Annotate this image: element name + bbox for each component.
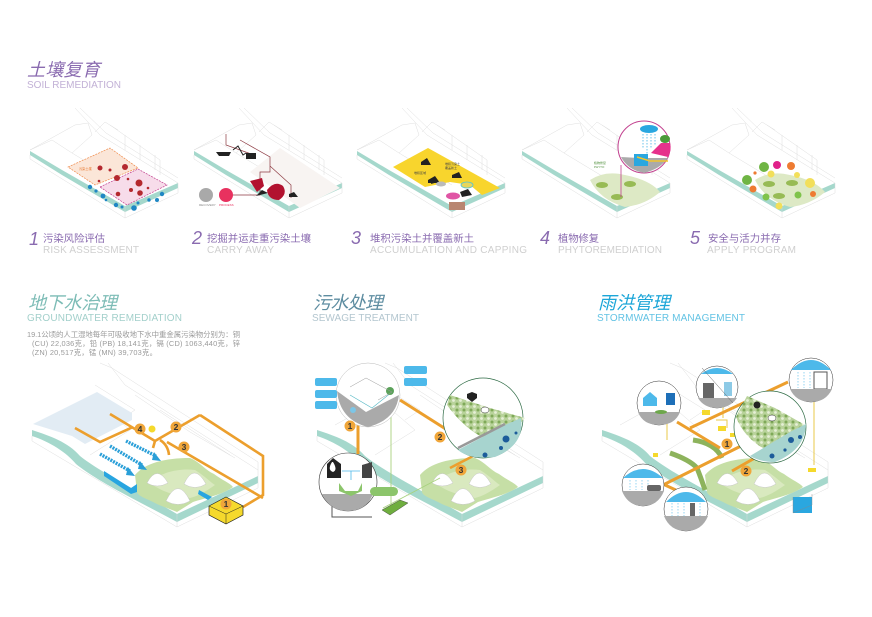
icon captions (199, 203, 234, 207)
label: step 2: 2 (191, 228, 202, 248)
wetland unit (382, 500, 408, 515)
label: step 3 (351, 228, 527, 256)
rain (643, 134, 655, 154)
bottom left circle (319, 453, 377, 511)
green caption: 植物修复 (594, 160, 606, 165)
circle icon: transport (219, 188, 233, 202)
number badges: 3 (182, 442, 187, 452)
text block: heavy metal absorption: (CU) 22,036克，铅 (PB) 18,141克，镉 (CD) 1063,440克，锌 (32, 339, 241, 348)
label: step 1 (29, 229, 139, 256)
label: step 2: CARRY AWAY (207, 245, 274, 256)
yellow treatment box (209, 497, 243, 524)
excavation machines (216, 146, 298, 197)
green caption (594, 160, 606, 169)
label: step 5: 安全与活力并存 (708, 232, 781, 245)
number badges: 1 (725, 439, 730, 449)
label: step 3: ACCUMULATION AND CAPPING (370, 245, 527, 256)
yellow pipes (667, 400, 814, 465)
text block: heavy metal absorption: 19.1公顷的人工湿地每年可吸收地下水中重金属污染物分别为：铜 (27, 330, 240, 339)
icon captions: RECOVERY (199, 203, 216, 207)
label: step 5 (690, 228, 796, 256)
number badges: 2 (744, 466, 749, 476)
heading: soil remediation: SOIL REMEDIATION (27, 80, 121, 91)
yellow zone captions: 堆积污染土 (445, 161, 460, 166)
orange pipes (358, 400, 500, 468)
circle: rain and canopy (789, 358, 833, 402)
label: step 1: 1 (29, 229, 39, 249)
wetland circle (734, 391, 806, 463)
circle: person in rain (664, 487, 708, 531)
blue section (793, 494, 812, 513)
heading: sewage treatment: SEWAGE TREATMENT (312, 313, 419, 324)
green activity area (755, 173, 825, 207)
label: step 5: APPLY PROGRAM (707, 245, 796, 256)
magnifier circle (618, 121, 671, 173)
heading: soil remediation (27, 60, 121, 91)
heading: stormwater management: STORMWATER MANAGEMENT (597, 313, 745, 324)
green pipe route (383, 415, 440, 508)
orange pipes (663, 382, 788, 492)
pink risk zone (100, 169, 167, 205)
pink mound (446, 192, 460, 200)
number badges: 1 (224, 499, 229, 509)
yellow zone captions (414, 161, 460, 175)
panel: step 5 apply program (687, 108, 835, 218)
yellow zone captions: 覆盖新土 (445, 165, 457, 170)
hatched water surface (33, 392, 132, 444)
label: step 2 (191, 228, 312, 256)
green caption: PHYTO (594, 165, 605, 169)
label: step 3: 堆积污染土并覆盖新土 (370, 232, 474, 245)
machines (421, 158, 472, 197)
wetland circle (443, 378, 525, 458)
circle: city buildings (696, 366, 738, 408)
number badges: 1 (348, 421, 353, 431)
blue inflow (198, 490, 212, 500)
circle icon: recycle (199, 188, 213, 202)
orange risk zone (68, 148, 138, 185)
green planting area (590, 173, 660, 207)
blue and yellow mound (461, 182, 473, 188)
panel: step 4 phytoremediation (522, 108, 671, 218)
brown sign (449, 202, 465, 210)
text block: heavy metal absorption: (ZN) 20,517克，锰 (MN) 39,703克。 (32, 348, 157, 357)
heading: stormwater management: 雨洪管理 (598, 293, 673, 313)
yellow capping zone (393, 148, 500, 195)
text block: heavy metal absorption (27, 330, 241, 357)
yellow zone captions: 堆积区域 (414, 170, 426, 175)
blue drain channel (104, 471, 137, 494)
green swales (670, 440, 722, 490)
gray mound (436, 182, 446, 186)
label: step 4: 植物修复 (558, 232, 599, 245)
arrow heads (126, 452, 161, 476)
rain cloud (640, 125, 658, 133)
wastewater path (332, 480, 372, 517)
heading: stormwater management (597, 293, 745, 324)
number badges: 3 (459, 465, 464, 475)
heading: sewage treatment (312, 293, 419, 324)
icon captions: PROCESS (219, 203, 234, 207)
circle: rain to building (637, 381, 681, 425)
planting mounds (596, 181, 636, 200)
number badges (134, 422, 232, 510)
panel: step 2 carry away (194, 108, 342, 218)
pink planted slope (651, 143, 671, 157)
gray ground (621, 157, 668, 173)
panel: stormwater diagram (602, 358, 833, 531)
contamination markers (98, 164, 149, 196)
magenta connector (620, 165, 622, 197)
heading: groundwater remediation (27, 293, 182, 324)
number badges (344, 420, 466, 476)
planting mounds (763, 180, 798, 199)
label: step 2: 挖掘并运走重污染土壤 (207, 232, 312, 245)
top section circle (336, 363, 400, 427)
number badges: 2 (174, 422, 179, 432)
panel: sewage diagram (315, 363, 543, 527)
number badges: 4 (138, 424, 143, 434)
panel: step 3 accumulation and capping (357, 108, 505, 218)
label: step 3: 3 (351, 228, 361, 248)
blue flow arrows (100, 441, 156, 471)
heading: groundwater remediation: GROUNDWATER REMEDIATION (27, 313, 182, 324)
circle: road runoff (622, 464, 664, 506)
number badges: 2 (438, 432, 443, 442)
heading: soil remediation: 土壤复育 (27, 60, 103, 80)
label: step 1: 污染风险评估 (43, 232, 105, 245)
blue water dots (88, 185, 164, 211)
label: step 4: 4 (540, 228, 550, 248)
program icons (742, 161, 816, 210)
green label (370, 487, 398, 496)
orange pipes (75, 414, 263, 507)
blue labels (315, 366, 427, 409)
label: step 4: PHYTOREMEDIATION (558, 245, 662, 256)
haul route lines (226, 134, 291, 198)
label: step 5: 5 (690, 228, 701, 248)
speckled excavated zone (250, 148, 340, 208)
label: step 4 (540, 228, 662, 256)
number badges (722, 438, 752, 476)
yellow marker (148, 426, 156, 432)
heading: sewage treatment: 污水处理 (313, 293, 386, 313)
panel: groundwater diagram (32, 363, 263, 527)
plants (660, 135, 670, 143)
yellow markers (653, 410, 816, 472)
orange zone label: 污染土壤 (79, 166, 93, 171)
contaminated soil mounds (250, 178, 264, 192)
water section (634, 154, 648, 166)
panel: step 1 risk assessment (30, 108, 178, 218)
label: step 1: RISK ASSESSMENT (43, 245, 139, 256)
yellow layer (637, 157, 668, 161)
heading: groundwater remediation: 地下水治理 (28, 293, 120, 313)
